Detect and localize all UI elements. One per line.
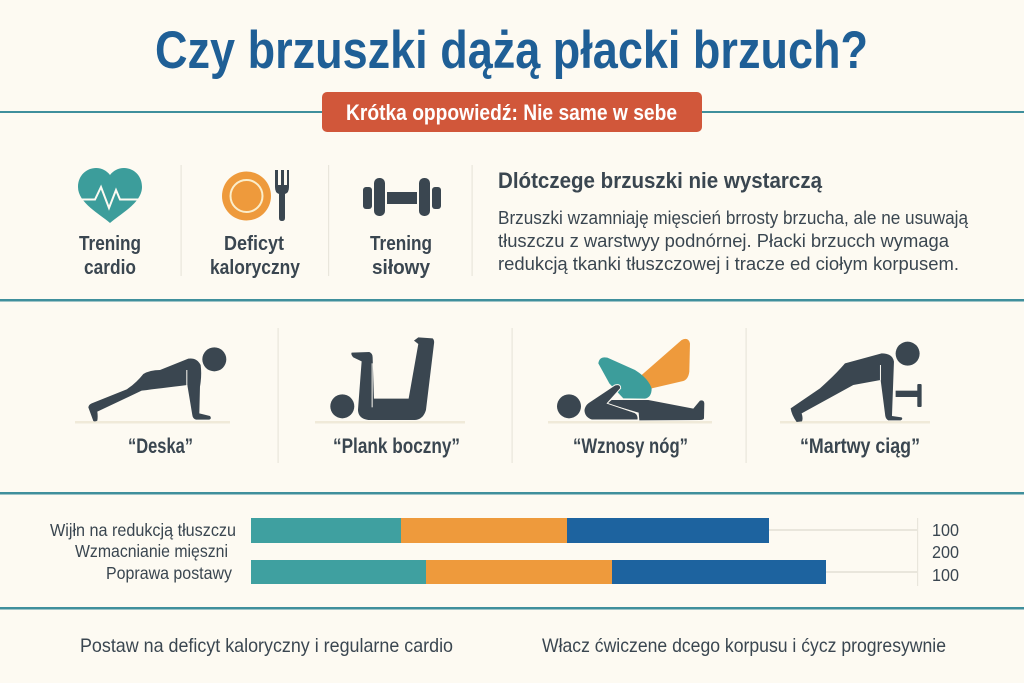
explanation text: Brzuszki wzamniaję mięscień brrosty brzucha, ale ne usuwają (498, 207, 969, 228)
label: strength: siłowy (372, 256, 431, 279)
chart values: 200 (932, 542, 959, 562)
exercise: leg raises (548, 339, 712, 458)
chart labels: Wijłn na redukcją tłuszczu (50, 520, 236, 540)
short answer banner (322, 92, 702, 132)
label: strength: Trening (370, 232, 432, 255)
panel: exercises (75, 337, 930, 458)
chart values: 100 (932, 565, 959, 585)
icon: heart with pulse (76, 168, 144, 223)
chart guides (769, 518, 918, 586)
explanation text: tłuszczu z warstwyy podnórnej. Płacki brzucch wymaga (498, 230, 950, 251)
caption: “Wznosy nóg” (573, 435, 688, 458)
explanation text: redukcją tkanki tłuszczowej i tracze ed ciołym korpusem. (498, 253, 959, 274)
caption: “Deska” (128, 435, 193, 458)
exercise: side plank (315, 337, 465, 458)
label: calorie deficit: kaloryczny (210, 256, 300, 279)
exercise: deadlift (780, 342, 930, 458)
exercise: plank (75, 347, 230, 458)
short answer banner: Krótka oppowiedź: Nie same w sebe (346, 100, 677, 125)
footer tip: right: Włacz ćwiczene dcego korpusu i ćycz progresywnie (542, 635, 946, 657)
panel: methods (76, 168, 441, 279)
footer tip: left: Postaw na deficyt kaloryczny i regularne cardio (80, 635, 453, 657)
icon: dumbbell (363, 178, 441, 216)
title: Czy brzuszki dążą płacki brzuch? (155, 21, 868, 80)
chart labels: Wzmacnianie mięszni (75, 541, 228, 561)
label: calorie deficit (210, 232, 300, 279)
explanation heading: Dlótczege brzuszki nie wystarczą (498, 168, 823, 193)
chart values: 100 (932, 520, 959, 540)
explanation text (498, 207, 969, 274)
chart labels: Poprawa postawy (106, 563, 232, 583)
caption: “Plank boczny” (333, 435, 460, 458)
label: cardio: Trening (79, 232, 141, 255)
icon: plate and fork (222, 170, 289, 221)
caption: “Martwy ciąg” (800, 435, 920, 458)
label: calorie deficit: Deficyt (224, 232, 284, 255)
bar: posture (251, 560, 826, 584)
label: cardio: cardio (84, 256, 136, 279)
label: cardio (79, 232, 141, 279)
panel: bar chart (50, 518, 959, 586)
label: strength (370, 232, 432, 279)
bar: fat reduction (251, 518, 769, 543)
chart labels (50, 520, 236, 583)
chart values (932, 520, 959, 585)
